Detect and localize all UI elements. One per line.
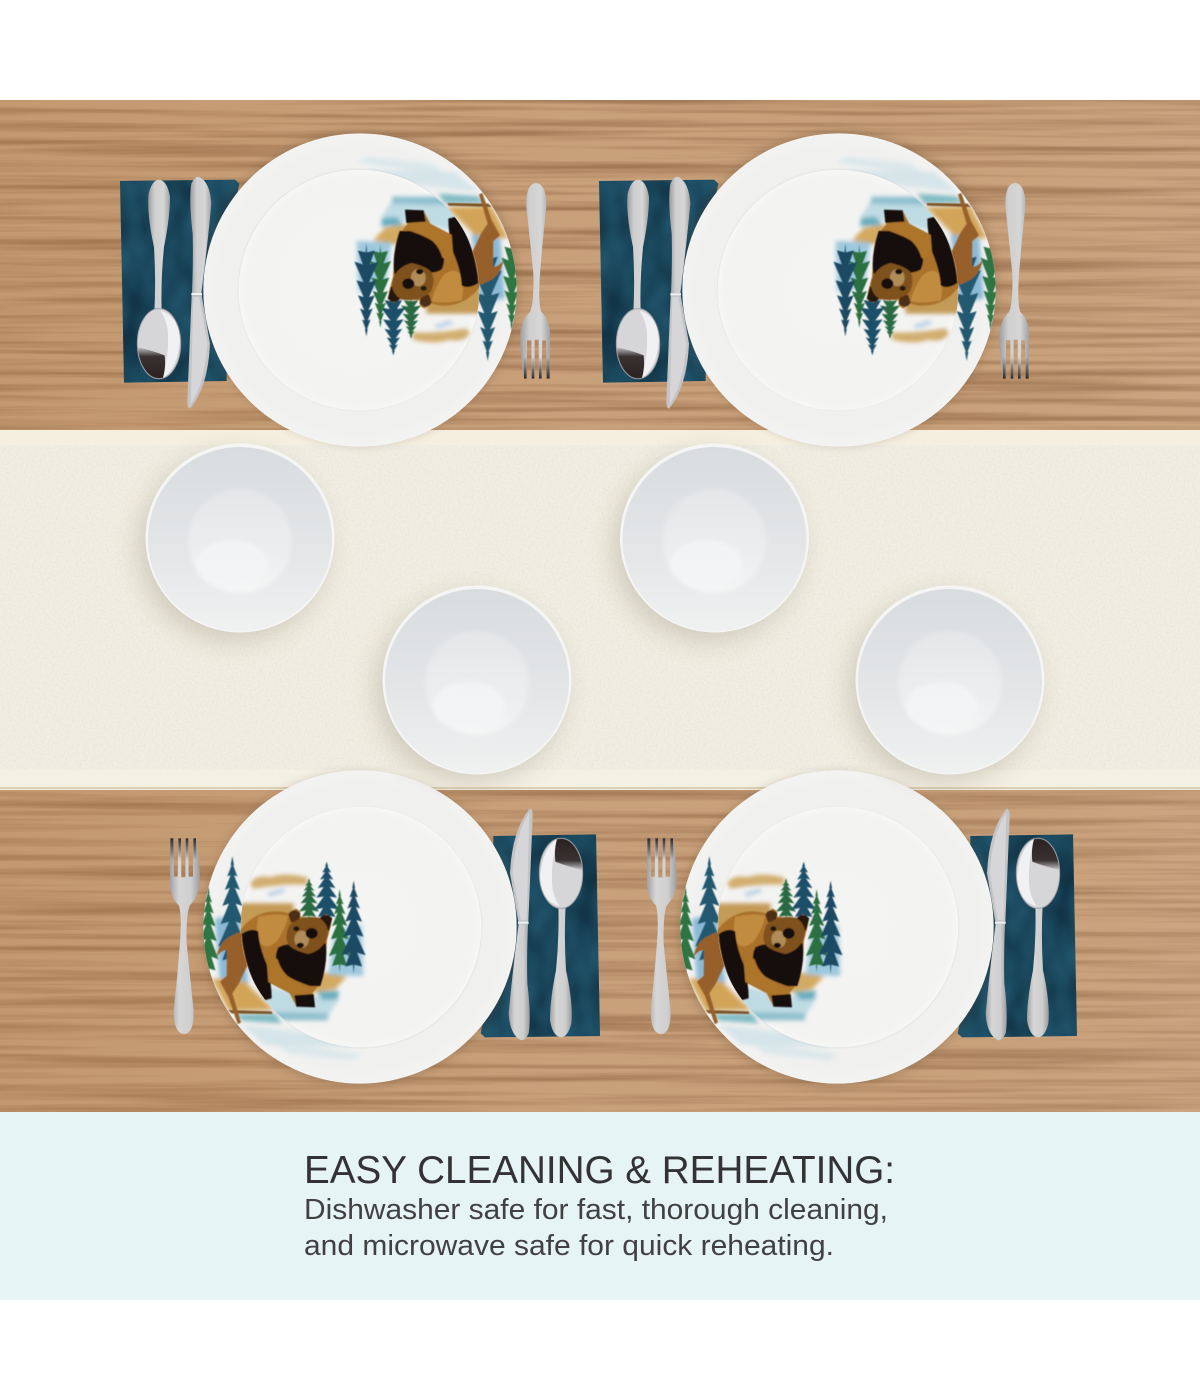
spoon [616,180,660,379]
large dinner plate with bear art [675,770,994,1087]
heading: EASY CLEANING & REHEATING: [304,1149,895,1192]
napkin [958,834,1077,1037]
table runner [0,430,1200,790]
large dinner plate with bear art [198,770,517,1087]
fork [170,838,200,1034]
small salad plate with bear art [237,807,482,1048]
small salad plate with bear art [238,169,483,410]
bowl: lower left [375,586,572,784]
fork [520,183,550,379]
knife [509,808,533,1040]
napkin [599,180,718,383]
bowl: upper left [138,444,334,642]
caption panel [0,1112,1200,1300]
description line 2: and microwave safe for quick reheating. [304,1230,834,1262]
bowl: lower right [848,586,1044,784]
napkin [481,834,600,1037]
small salad plate with bear art [714,807,959,1048]
napkin [120,180,239,383]
spoon [539,838,583,1037]
spoon [1016,838,1060,1037]
place setting: top left [120,130,550,447]
knife [187,177,211,409]
fork [647,838,677,1034]
large dinner plate with bear art [203,130,522,447]
place setting: bottom left [170,770,600,1087]
fork [999,183,1029,379]
bowl: upper right [612,444,809,642]
spoon [137,180,181,379]
knife [986,808,1010,1040]
description line 1: Dishwasher safe for fast, thorough cleaning, [304,1194,888,1226]
knife [666,177,690,409]
place setting: bottom right [647,770,1077,1087]
small salad plate with bear art [717,169,962,410]
place setting: top right [599,130,1029,447]
large dinner plate with bear art [682,130,1001,447]
wooden table [0,100,1200,1112]
